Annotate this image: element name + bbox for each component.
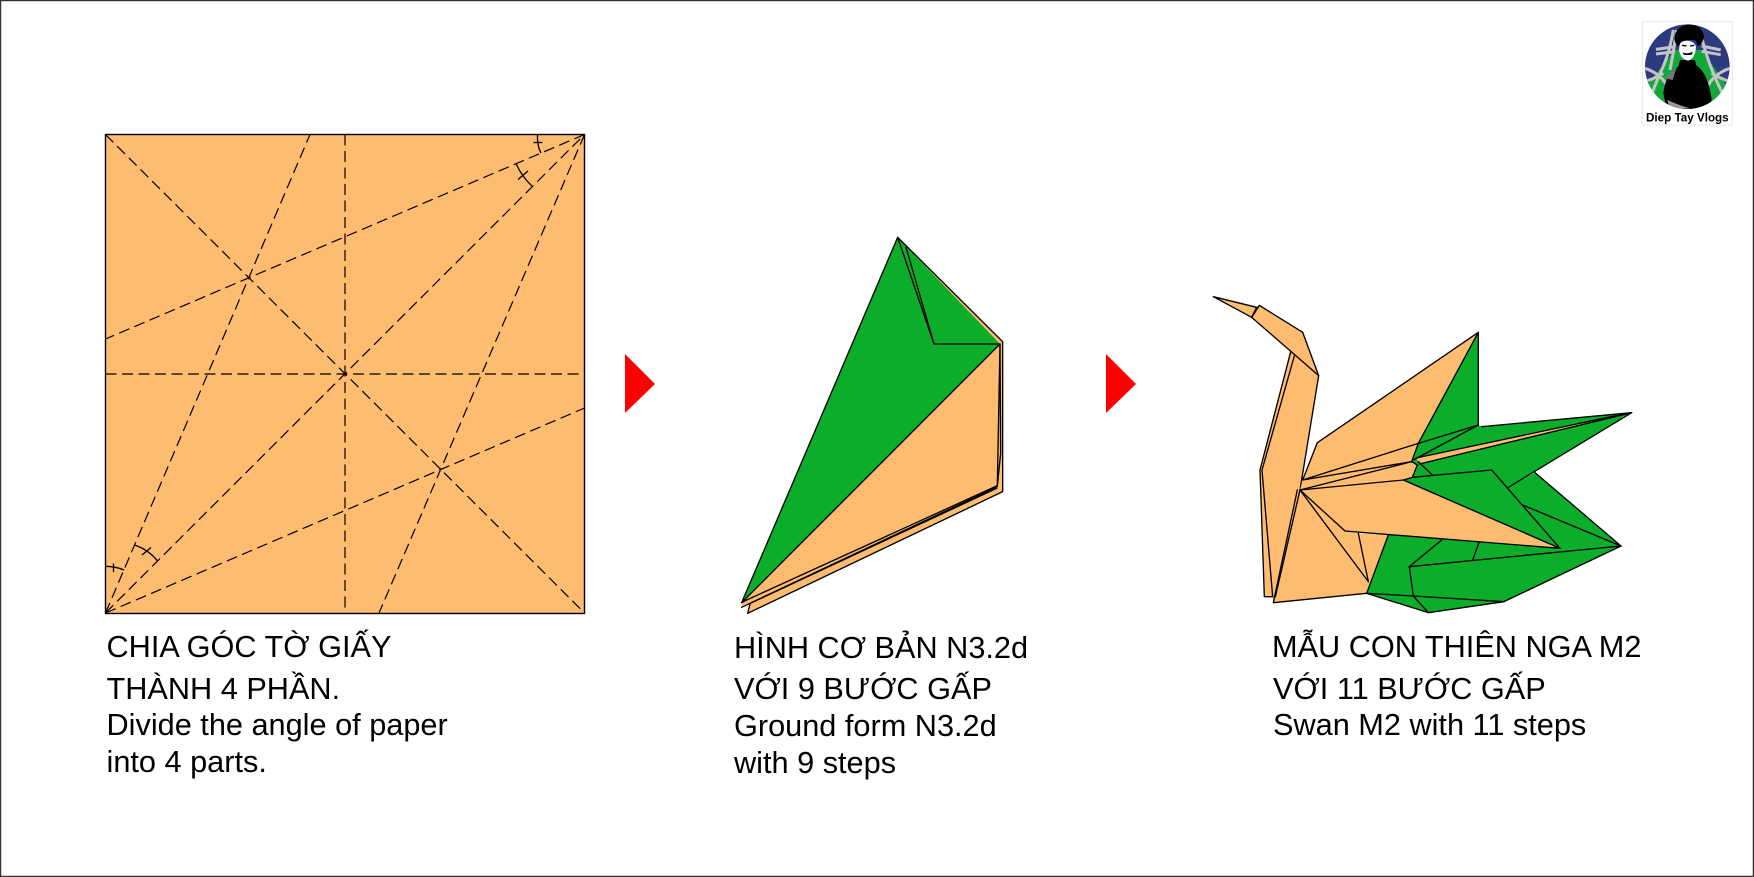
angle marks top-right: [516, 134, 542, 186]
caption: step 1: Divide the angle of paper: [106, 707, 448, 742]
caption: step 2: [733, 630, 1028, 780]
caption: step 2: HÌNH CƠ BẢN N3.2d: [734, 630, 1028, 665]
logo: Diep Tay Vlogs: [1642, 22, 1733, 125]
caption: step 1: [106, 629, 448, 779]
swan body: [1273, 490, 1388, 603]
caption: step 2: Ground form N3.2d: [734, 708, 997, 743]
arrow: first step: [625, 354, 655, 413]
logo caption: Diep Tay Vlogs: [1646, 112, 1729, 125]
caption: step 1: into 4 parts.: [106, 744, 267, 779]
caption: step 2: VỚI 9 BƯỚC GẤP: [734, 671, 992, 706]
caption: step 3: VỚI 11 BƯỚC GẤP: [1273, 671, 1546, 706]
caption: step 3: MẪU CON THIÊN NGA M2: [1272, 629, 1641, 664]
panel: ground form N3.2d: [742, 237, 1003, 613]
caption: step 1: CHIA GÓC TỜ GIẤY: [106, 629, 391, 664]
arrow: second step: [1106, 354, 1136, 413]
caption: step 2: with 9 steps: [733, 745, 896, 780]
caption: step 3: Swan M2 with 11 steps: [1273, 707, 1586, 742]
caption: step 1: THÀNH 4 PHẦN.: [106, 671, 340, 706]
swan wings: [1300, 332, 1560, 548]
angle marks bottom-left: [106, 545, 158, 572]
panel: swan M2: [1213, 297, 1632, 613]
caption: step 3: [1272, 629, 1641, 742]
swan neck and head: [1213, 297, 1319, 603]
panel: paper square with crease lines: [106, 134, 584, 614]
swan tail and back layers: [1367, 332, 1632, 613]
